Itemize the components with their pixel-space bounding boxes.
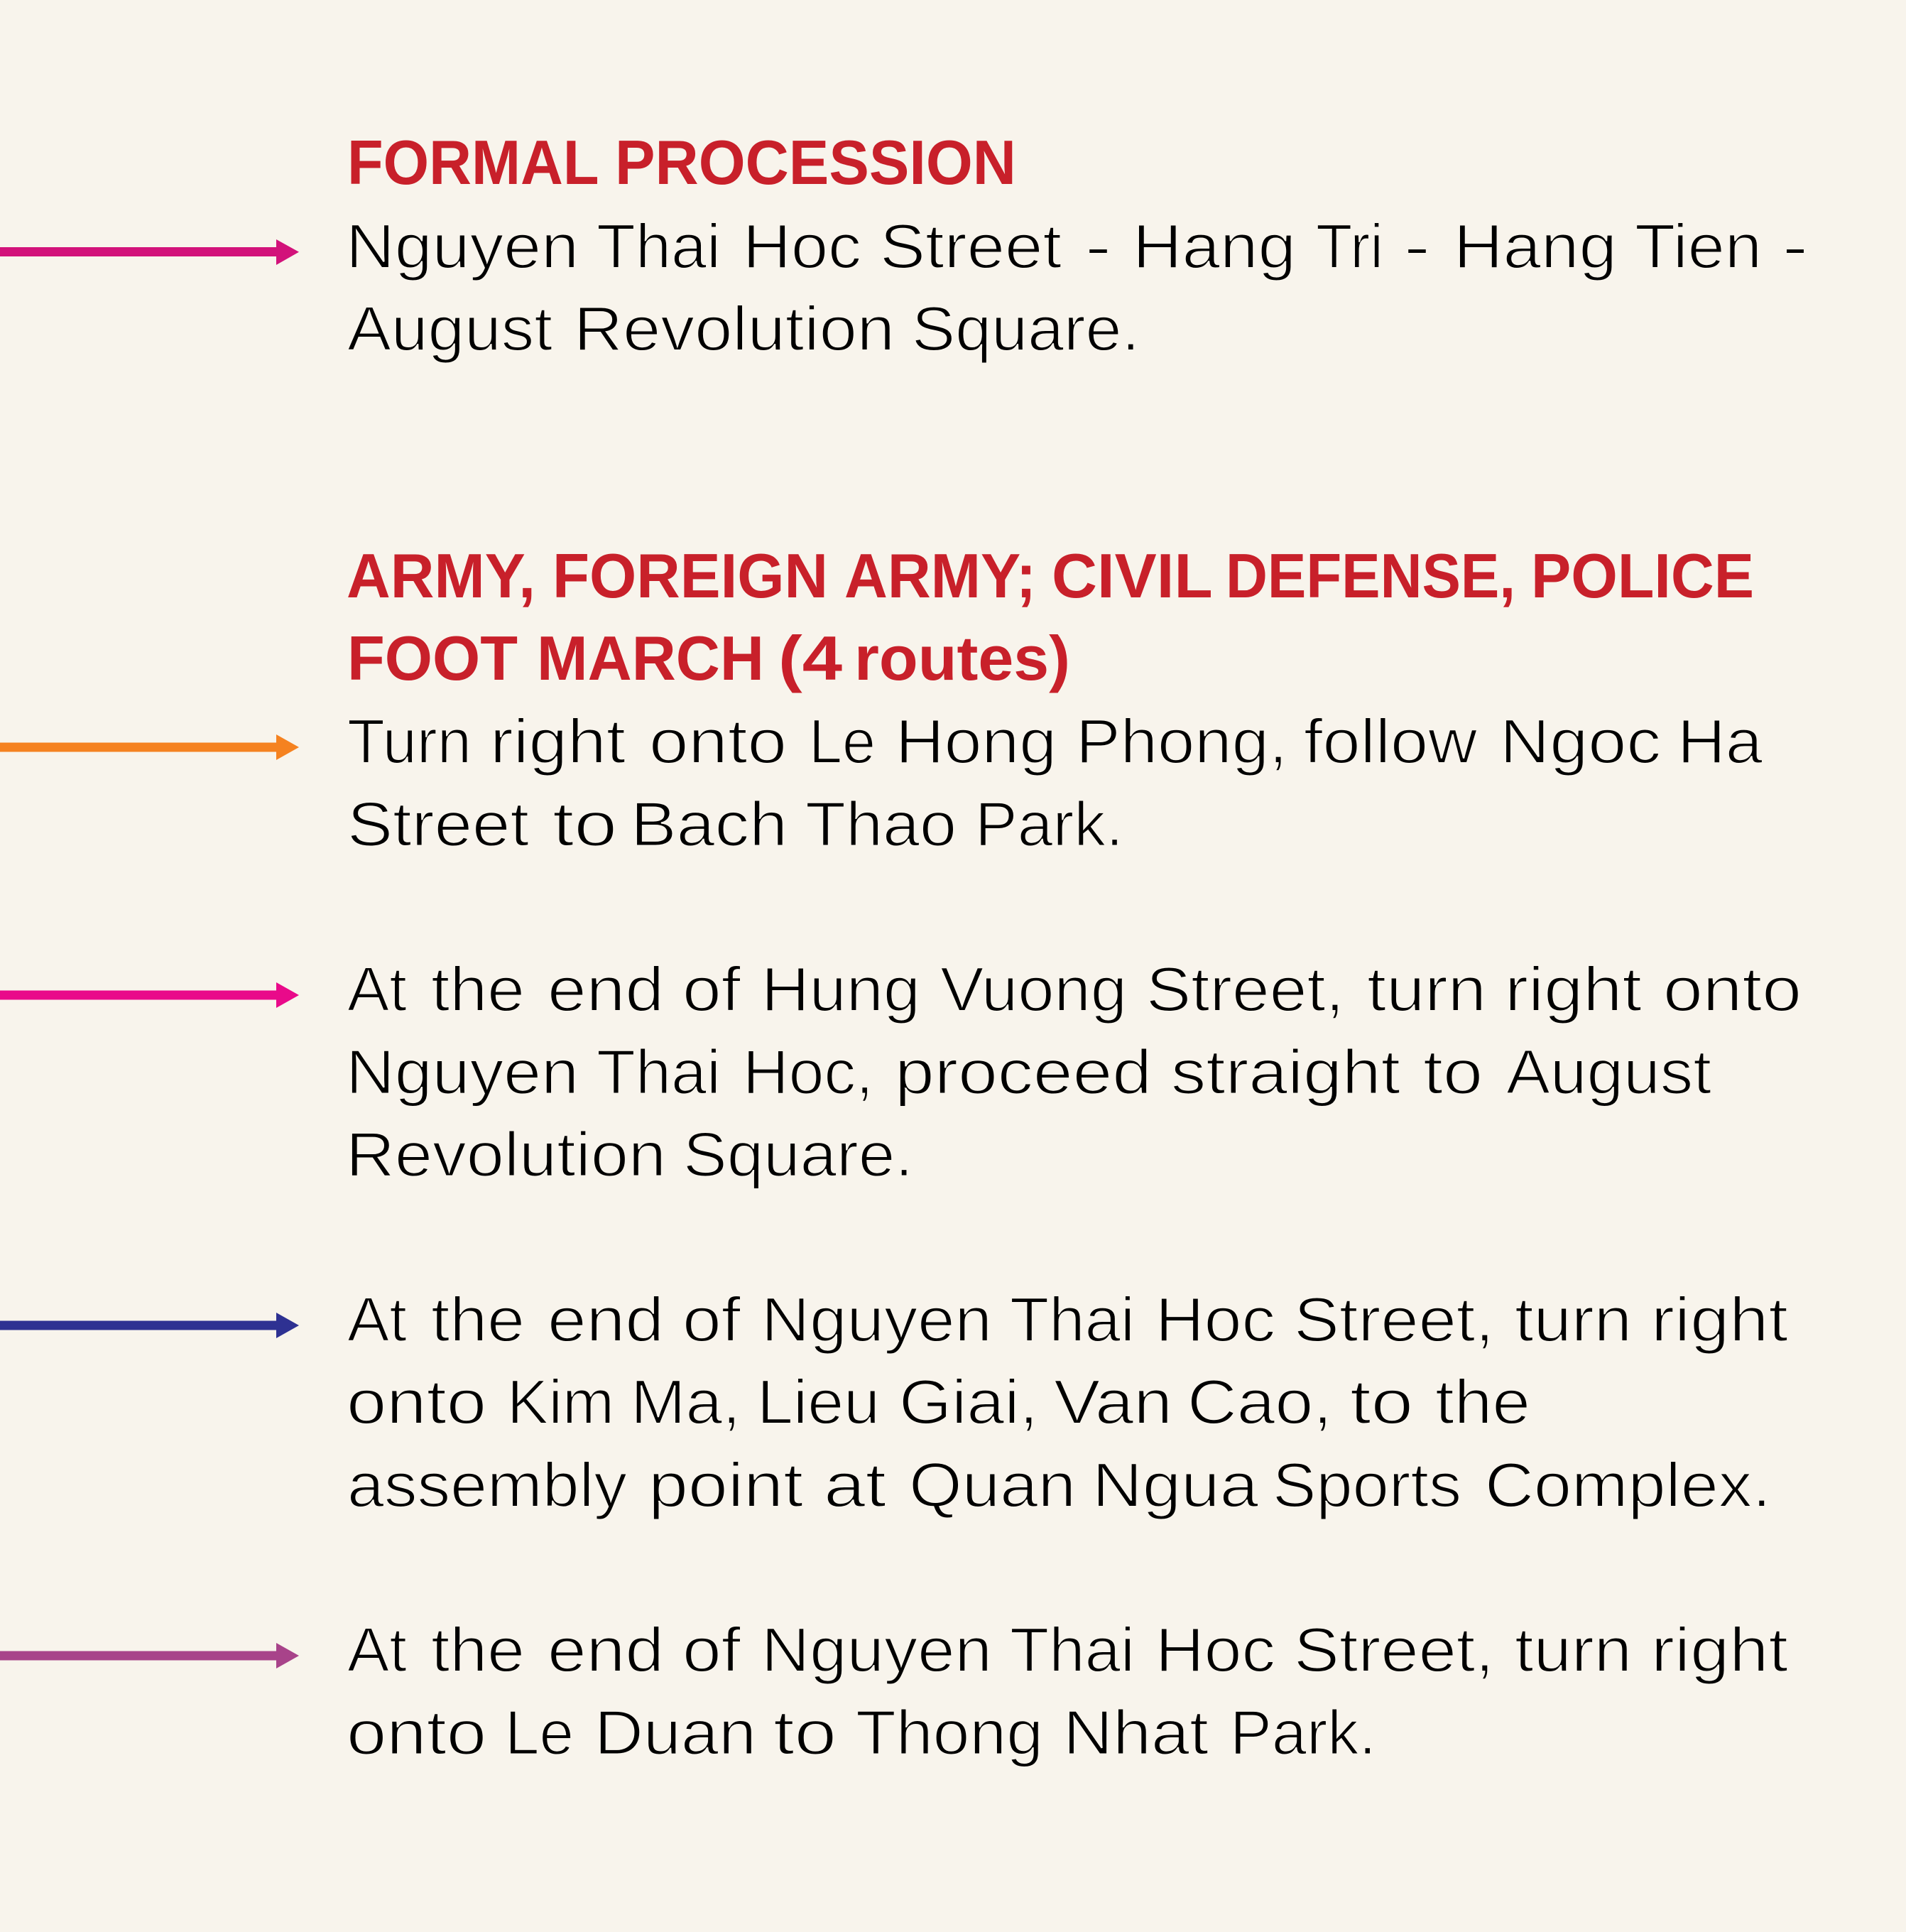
text: route 4: to	[773, 1698, 837, 1767]
heading: army foot march: FOOT	[347, 623, 518, 693]
text: route 2: onto	[1663, 954, 1802, 1024]
text: route 4: At	[347, 1614, 407, 1685]
text: route 2: Square.	[683, 1119, 913, 1189]
heading: army foot march: POLICE	[1531, 541, 1754, 611]
text: route 1: Ngoc	[1500, 706, 1661, 776]
text: route 4: Thai	[1010, 1614, 1135, 1685]
text: route 1: right	[490, 706, 626, 776]
section: foot march routes	[0, 541, 1802, 1767]
text: route 4: onto	[347, 1698, 486, 1767]
text: route 2: right	[1505, 954, 1642, 1024]
text: route 3: Sports	[1273, 1450, 1461, 1520]
text: formal procession route: August	[347, 293, 552, 364]
heading: army foot march: ARMY;	[844, 541, 1036, 611]
text: route 3: Complex.	[1485, 1450, 1771, 1520]
text: route 2: Nguyen	[346, 1037, 579, 1107]
section: formal procession	[0, 127, 1808, 364]
text: route 2: proceed	[895, 1037, 1152, 1107]
text: route 3: right	[1651, 1284, 1788, 1355]
text: route 3: at	[824, 1450, 886, 1520]
text: route 4: Street,	[1294, 1614, 1494, 1685]
text: route 2: August	[1506, 1037, 1711, 1107]
text: route 3	[347, 1284, 1788, 1520]
text: route 3: Hoc	[1155, 1284, 1275, 1355]
text: route 1: Ha	[1677, 706, 1763, 776]
text: route 2: Revolution	[346, 1119, 666, 1189]
text: formal procession route: Square.	[912, 293, 1140, 364]
text: route 2: Thai	[597, 1037, 721, 1107]
text: route 2	[346, 954, 1802, 1189]
text: route 4: Le	[505, 1698, 574, 1767]
text: route 2: end	[548, 954, 664, 1024]
arrow: route 2 pink	[0, 982, 299, 1008]
text: route 1: Phong,	[1076, 706, 1287, 776]
text: route 3: end	[548, 1284, 664, 1355]
text: route 2: to	[1423, 1037, 1483, 1107]
text: formal procession route: -	[1782, 211, 1808, 281]
text: route 3: Nguyen	[761, 1284, 992, 1355]
heading: army foot march: DEFENSE,	[1226, 541, 1515, 611]
text: formal procession route: Tien	[1635, 211, 1762, 281]
text: route 2: the	[431, 954, 525, 1024]
text: route 3: of	[682, 1284, 741, 1355]
text: route 4: turn	[1515, 1614, 1632, 1685]
text: route 4: end	[548, 1614, 664, 1685]
heading: army foot march: FOREIGN	[552, 541, 828, 611]
heading: army foot march: (4	[778, 623, 842, 693]
text: route 4: right	[1651, 1614, 1788, 1685]
text: formal procession route: Hoc	[743, 211, 861, 281]
heading: army foot march: MARCH	[537, 623, 764, 693]
text: route 3: Thai	[1010, 1284, 1135, 1355]
text: formal procession route	[346, 211, 1808, 364]
arrow: route 1 orange	[0, 734, 299, 760]
text: route 4: Nguyen	[761, 1614, 992, 1685]
text: formal procession route: -	[1404, 211, 1430, 281]
heading: formal procession: FORMAL	[347, 127, 598, 197]
text: route 1: Le	[809, 706, 876, 776]
text: route 4: Hoc	[1155, 1614, 1275, 1685]
text: formal procession route: Thai	[597, 211, 721, 281]
text: formal procession route: Tri	[1316, 211, 1383, 281]
text: route 2: Hung	[761, 954, 920, 1024]
text: route 3: Kim	[507, 1367, 614, 1437]
text: route 3: Ma,	[631, 1367, 741, 1437]
text: route 1	[347, 706, 1763, 859]
text: route 1: Hong	[895, 706, 1057, 776]
text: route 2: Hoc,	[743, 1037, 873, 1107]
text: route 3: assembly	[347, 1450, 627, 1520]
text: route 3: Street,	[1294, 1284, 1494, 1355]
text: route 4: Park.	[1230, 1698, 1376, 1767]
text: route 1: Thao	[805, 788, 957, 859]
text: route 4: of	[682, 1614, 741, 1685]
text: route 1: Street	[347, 788, 529, 859]
text: route 3: to	[1350, 1367, 1413, 1437]
text: route 1: Turn	[347, 706, 472, 776]
heading: army foot march	[347, 541, 1754, 693]
text: route 3: the	[431, 1284, 525, 1355]
text: route 3: turn	[1515, 1284, 1632, 1355]
text: route 1: follow	[1304, 706, 1477, 776]
text: route 3: Ngua	[1092, 1450, 1258, 1520]
text: route 2: of	[682, 954, 741, 1024]
text: route 3: Lieu	[757, 1367, 880, 1437]
heading: army foot march: CIVIL	[1052, 541, 1211, 611]
heading: army foot march: ARMY,	[347, 541, 535, 611]
text: route 2: At	[347, 954, 407, 1024]
text: route 1: Park.	[975, 788, 1123, 859]
text: route 2: Street,	[1146, 954, 1344, 1024]
text: route 2: straight	[1171, 1037, 1400, 1107]
text: formal procession route: Hang	[1454, 211, 1617, 281]
text: route 3: onto	[347, 1367, 486, 1437]
text: route 3: At	[347, 1284, 407, 1355]
text: route 3: Quan	[909, 1450, 1076, 1520]
arrow: formal procession route	[0, 239, 299, 265]
text: route 1: Bach	[631, 788, 788, 859]
text: formal procession route: Hang	[1133, 211, 1296, 281]
text: route 3: point	[648, 1450, 803, 1520]
text: route 4: Nhat	[1063, 1698, 1209, 1767]
text: route 3: Giai,	[899, 1367, 1038, 1437]
heading: army foot march: routes)	[854, 623, 1070, 693]
text: route 1: onto	[649, 706, 787, 776]
text: formal procession route: -	[1085, 211, 1111, 281]
text: route 4: Duan	[594, 1698, 756, 1767]
text: route 3: Cao,	[1187, 1367, 1332, 1437]
text: route 4: the	[431, 1614, 525, 1685]
text: formal procession route: Revolution	[574, 293, 895, 364]
text: route 3: the	[1435, 1367, 1530, 1437]
text: route 1: to	[552, 788, 617, 859]
text: route 4: Thong	[856, 1698, 1043, 1767]
text: formal procession route: Street	[880, 211, 1062, 281]
arrow: route 4 purple	[0, 1643, 299, 1668]
text: route 4	[347, 1614, 1788, 1767]
heading: formal procession: PROCESSION	[615, 127, 1016, 197]
text: route 3: Van	[1054, 1367, 1172, 1437]
text: route 2: Vuong	[940, 954, 1127, 1024]
text: route 2: turn	[1367, 954, 1486, 1024]
arrow: route 3 navy	[0, 1313, 299, 1338]
text: formal procession route: Nguyen	[346, 211, 579, 281]
